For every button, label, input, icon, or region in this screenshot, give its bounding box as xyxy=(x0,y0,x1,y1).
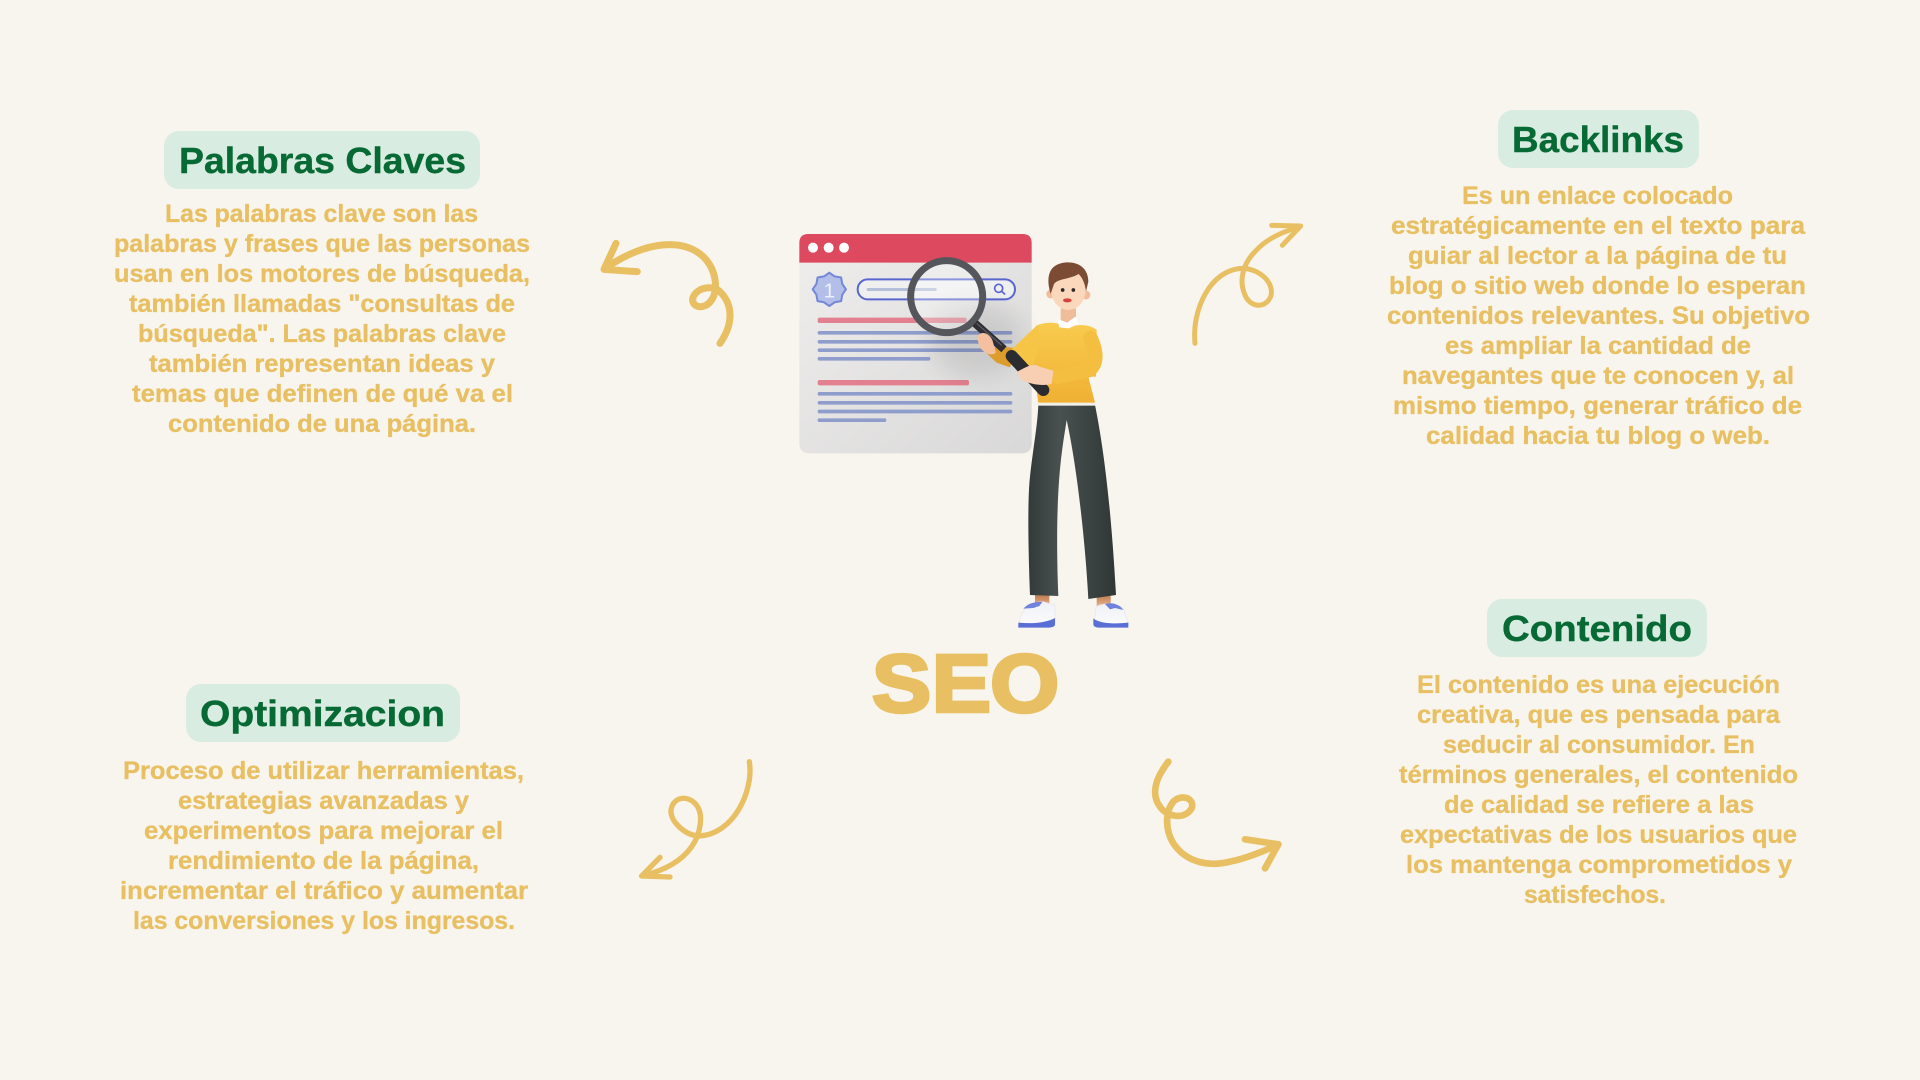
text block: optimizacion xyxy=(120,757,528,935)
text block: backlinks xyxy=(1387,182,1810,450)
neck xyxy=(1061,308,1076,326)
text block: backlinks: navegantes que te conocen y, al xyxy=(1402,362,1794,390)
collar xyxy=(1057,317,1079,328)
heading pill: optimizacion: Optimizacion xyxy=(200,693,445,734)
magnifier shadow xyxy=(930,303,1023,377)
hands xyxy=(977,333,1053,385)
text block: contenido: seducir al consumidor. En xyxy=(1443,731,1755,759)
arrow: towards optimizacion xyxy=(642,762,750,877)
shoes xyxy=(1018,602,1129,628)
text block: contenido: El contenido es una ejecución xyxy=(1417,671,1780,699)
text block: palabras claves: búsqueda". Las palabras clave xyxy=(138,320,506,348)
text block: contenido: creativa, que es pensada para xyxy=(1417,701,1781,729)
text block: contenido xyxy=(1399,671,1798,909)
text block: backlinks: mismo tiempo, generar tráfico de xyxy=(1393,392,1802,420)
text block: contenido: de calidad se refiere a las xyxy=(1444,791,1754,819)
heading pill: contenido xyxy=(1487,599,1707,657)
heading pill: palabras claves: Palabras Claves xyxy=(179,140,466,181)
heading pill: optimizacion xyxy=(186,684,460,742)
text block: backlinks: estratégicamente en el texto para xyxy=(1391,212,1806,240)
panel: optimizacion xyxy=(120,684,528,935)
text block: palabras claves: Las palabras clave son las xyxy=(165,200,478,228)
text block: contenido: términos generales, el contenido xyxy=(1399,761,1798,789)
panel: contenido xyxy=(1399,599,1798,909)
illustration: person inspecting a search results page xyxy=(799,234,1129,628)
heading pill: palabras claves xyxy=(164,131,480,189)
arrow: towards backlinks xyxy=(1195,225,1301,343)
text block: palabras claves: también representan ideas y xyxy=(149,350,495,378)
text block: contenido: los mantenga comprometidos y xyxy=(1406,851,1792,879)
text block: backlinks: contenidos relevantes. Su objetivo xyxy=(1387,302,1810,330)
text block: palabras claves xyxy=(114,200,530,438)
text block: contenido: expectativas de los usuarios que xyxy=(1400,821,1797,849)
panel: backlinks xyxy=(1387,110,1810,450)
text block: optimizacion: incrementar el tráfico y aumentar xyxy=(120,877,528,905)
magnifying glass xyxy=(911,261,1043,390)
text block: palabras claves: también llamadas "consultas de xyxy=(129,290,515,318)
rank badge xyxy=(813,273,846,306)
text block: contenido: satisfechos. xyxy=(1524,881,1666,909)
text block: backlinks: guiar al lector a la página de tu xyxy=(1408,242,1787,270)
search bar xyxy=(858,279,1015,299)
arrow: towards contenido xyxy=(1155,762,1278,868)
text block: optimizacion: rendimiento de la página, xyxy=(168,847,479,875)
shirt hem xyxy=(1038,402,1095,406)
browser window xyxy=(799,234,1032,453)
text block: palabras claves: palabras y frases que las personas xyxy=(114,230,530,258)
rank badge: 1 xyxy=(824,279,835,302)
text block: backlinks: es ampliar la cantidad de xyxy=(1445,332,1751,360)
text block: optimizacion: Proceso de utilizar herramientas, xyxy=(123,757,524,785)
text block: optimizacion: las conversiones y los ingresos. xyxy=(133,907,515,935)
result lines xyxy=(818,318,1012,422)
main title: SEO: SEO xyxy=(872,638,1059,730)
text block: palabras claves: usan en los motores de búsqueda, xyxy=(114,260,530,288)
ankles xyxy=(1035,593,1111,607)
text block: palabras claves: contenido de una página. xyxy=(168,410,476,438)
trousers xyxy=(1028,405,1116,599)
heading pill: backlinks: Backlinks xyxy=(1512,119,1684,160)
head xyxy=(1046,262,1090,310)
text block: backlinks: blog o sitio web donde lo esperan xyxy=(1389,272,1806,300)
panel: palabras claves xyxy=(114,131,530,438)
text block: optimizacion: experimentos para mejorar el xyxy=(144,817,503,845)
person xyxy=(987,262,1129,628)
sweater xyxy=(1012,323,1097,403)
heading pill: backlinks xyxy=(1498,110,1699,168)
text block: optimizacion: estrategias avanzadas y xyxy=(178,787,469,815)
text block: backlinks: Es un enlace colocado xyxy=(1462,182,1733,210)
orange sleeve behind the handle xyxy=(987,346,1017,367)
heading pill: contenido: Contenido xyxy=(1502,608,1692,649)
text block: palabras claves: temas que definen de qué va el xyxy=(132,380,513,408)
text block: backlinks: calidad hacia tu blog o web. xyxy=(1426,422,1770,450)
arrow: towards palabras claves xyxy=(604,243,730,343)
